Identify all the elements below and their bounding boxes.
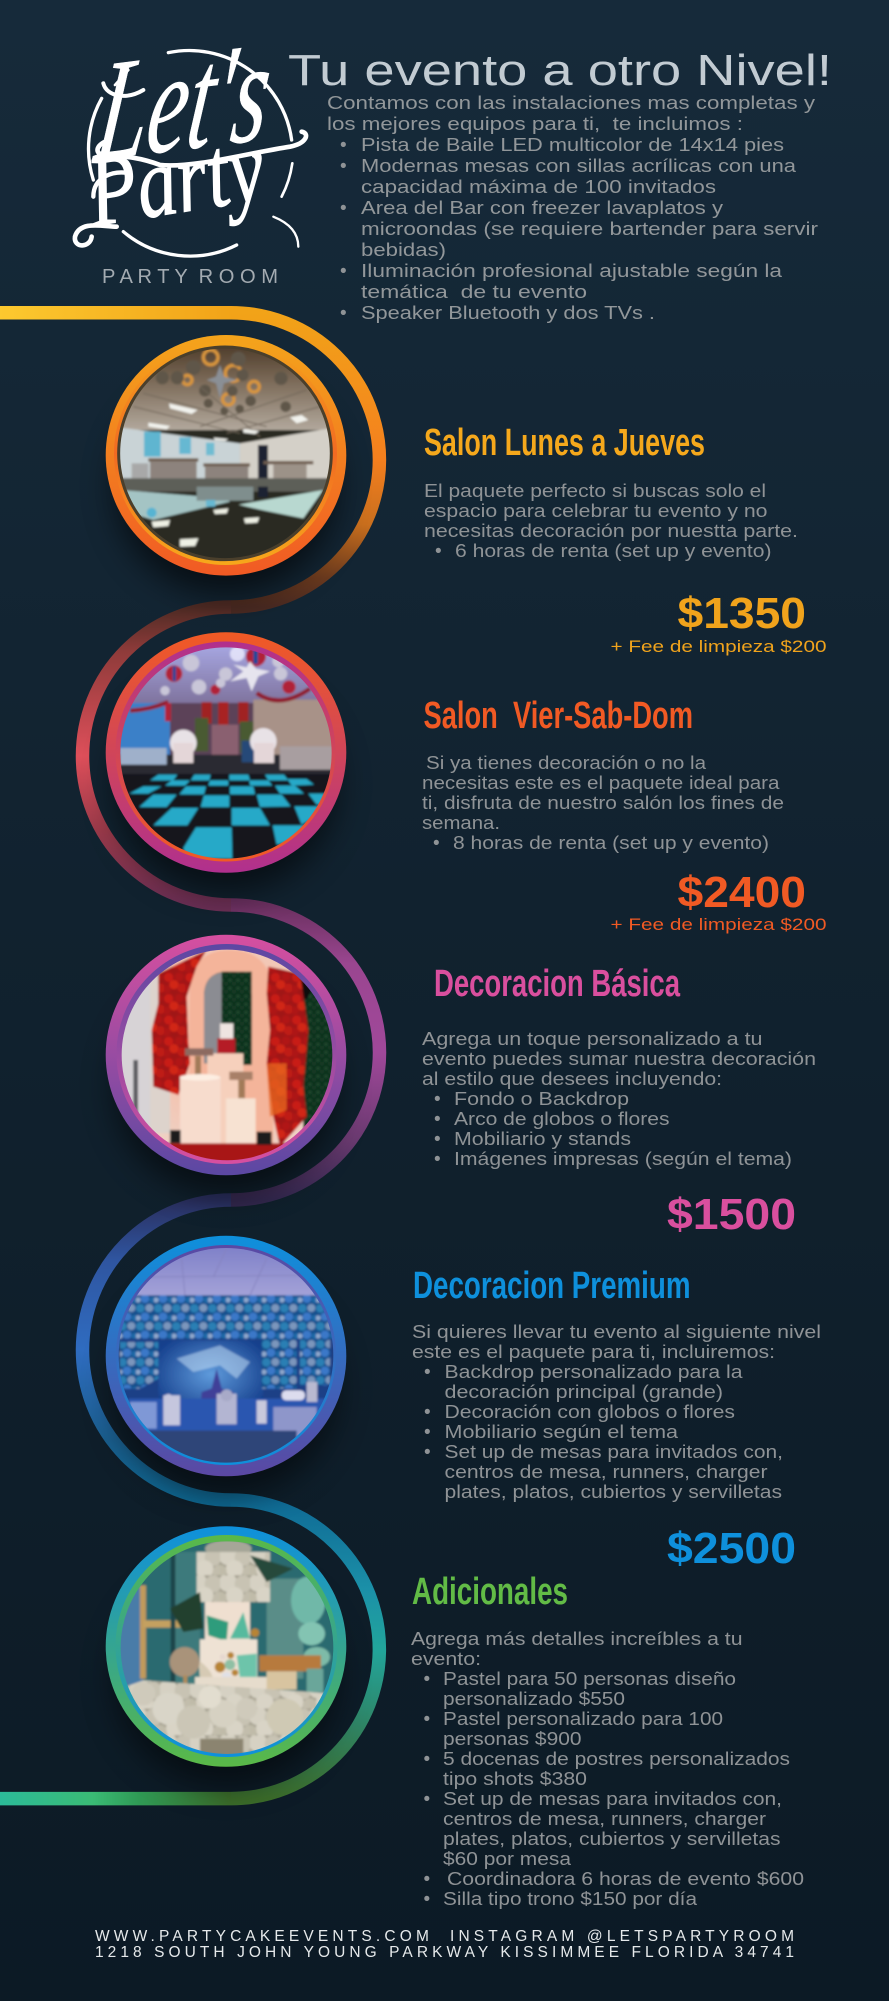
panel: Decoracion Premium	[412, 1265, 821, 1573]
description: Set up de mesas para invitados con,	[443, 1789, 782, 1809]
description: •	[424, 1889, 430, 1910]
intro text block: Pista de Baile LED multicolor de 14x14 pies	[361, 134, 784, 155]
panel: Salon Lunes a Jueves	[424, 422, 826, 656]
description: •	[434, 1109, 441, 1130]
heading: Salon Lunes a Jueves	[424, 422, 705, 464]
title: Tu evento a otro Nivel!	[288, 46, 832, 95]
intro text block: Iluminación profesional ajustable según la	[361, 260, 783, 281]
heading: Decoracion Básica	[434, 963, 681, 1005]
logo	[75, 11, 306, 288]
description: •	[433, 833, 440, 854]
logo ring and swashes	[75, 51, 306, 256]
intro text block: •	[340, 198, 347, 219]
description: semana.	[422, 813, 500, 833]
description: necesitas este es el paquete ideal para	[422, 773, 781, 793]
description: •	[424, 1749, 430, 1770]
price: $2400	[678, 868, 806, 917]
circle photo: cake and extras	[106, 1526, 346, 1786]
description: •	[424, 1789, 430, 1810]
price: $1500	[667, 1190, 796, 1239]
footer contact info: WWW.PARTYCAKEEVENTS.COM INSTAGRAM @LETSPARTYROOM	[95, 1928, 794, 1945]
description: plates, platos, cubiertos y servilletas	[444, 1482, 782, 1502]
description: •	[424, 1869, 430, 1890]
description: ti, disfruta de nuestro salón los fines de	[422, 793, 784, 813]
intro text block: •	[340, 135, 347, 156]
intro text block: los mejores equipos para ti, te incluimos :	[327, 113, 743, 134]
heading: Salon Vier-Sab-Dom	[424, 695, 693, 737]
description: $60 por mesa	[443, 1849, 572, 1869]
description: este es el paquete para ti, incluiremos:	[412, 1342, 775, 1362]
heading: Decoracion Premium	[413, 1265, 690, 1307]
intro text block: bebidas)	[361, 239, 446, 260]
intro text block: Speaker Bluetooth y dos TVs .	[361, 302, 655, 323]
price: $2500	[667, 1524, 796, 1573]
description: Decoración con globos o flores	[444, 1402, 735, 1422]
description	[422, 753, 784, 854]
heading: Adicionales	[412, 1571, 568, 1613]
description: tipo shots $380	[443, 1769, 587, 1789]
description: •	[424, 1422, 431, 1443]
description: 6 horas de renta (set up y evento)	[455, 541, 772, 561]
description: •	[424, 1709, 430, 1730]
description: •	[424, 1402, 431, 1423]
logo wordmark Let's: Let's	[88, 11, 279, 192]
description: Agrega un toque personalizado a tu	[422, 1029, 762, 1049]
description: evento:	[411, 1649, 481, 1669]
intro text block: microondas (se requiere bartender para servir	[361, 218, 818, 239]
description: 5 docenas de postres personalizados	[443, 1749, 790, 1769]
description: centros de mesa, runners, charger	[443, 1809, 766, 1829]
description: •	[434, 1089, 441, 1110]
description: Si quieres llevar tu evento al siguiente nivel	[412, 1322, 821, 1342]
description	[411, 1629, 804, 1910]
intro text block: •	[340, 303, 347, 324]
description: Arco de globos o flores	[454, 1109, 670, 1129]
circle photo: empty salon	[100, 335, 350, 594]
description: •	[434, 1129, 441, 1150]
panel: Adicionales	[411, 1571, 804, 1910]
description: Coordinadora 6 horas de evento $600	[447, 1869, 804, 1889]
intro text block: Modernas mesas con sillas acrílicas con una	[361, 155, 797, 176]
intro text block: Area del Bar con freezer lavaplatos y	[361, 197, 724, 218]
description: Mobiliario y stands	[454, 1129, 631, 1149]
footer contact info: 1218 SOUTH JOHN YOUNG PARKWAY KISSIMMEE FLORIDA 34741	[95, 1944, 794, 1961]
description: decoración principal (grande)	[444, 1382, 723, 1402]
description: Set up de mesas para invitados con,	[444, 1442, 783, 1462]
intro text block: temática de tu evento	[361, 281, 587, 302]
description: Imágenes impresas (según el tema)	[454, 1149, 792, 1169]
winding ribbon connecting the circles	[0, 313, 379, 1799]
description: Pastel personalizado para 100	[443, 1709, 723, 1729]
footer contact info	[95, 1928, 794, 1961]
description: Mobiliario según el tema	[444, 1422, 679, 1442]
description: Agrega más detalles increíbles a tu	[411, 1629, 742, 1649]
description: •	[424, 1669, 430, 1690]
description: •	[424, 1362, 431, 1383]
description: necesitas decoración por nuestta parte.	[424, 521, 798, 541]
cleaning fee: + Fee de limpieza $200	[610, 637, 826, 656]
description: plates, platos, cubiertos y servilletas	[443, 1829, 780, 1849]
description: Si ya tienes decoración o no la	[426, 753, 707, 773]
logo wordmark Party: Party	[79, 110, 272, 248]
description: El paquete perfecto si buscas solo el	[424, 481, 766, 501]
price: $1350	[678, 589, 806, 638]
description	[424, 481, 798, 562]
description: espacio para celebrar tu evento y no	[424, 501, 768, 521]
description: personalizado $550	[443, 1689, 625, 1709]
description: Fondo o Backdrop	[454, 1089, 629, 1109]
description: centros de mesa, runners, charger	[444, 1462, 768, 1482]
panel: Decoracion Básica	[422, 963, 816, 1239]
description: Pastel para 50 personas diseño	[443, 1669, 736, 1689]
description: evento puedes sumar nuestra decoración	[422, 1049, 816, 1069]
intro text block	[327, 92, 818, 324]
intro text block: capacidad máxima de 100 invitados	[361, 176, 716, 197]
description: •	[424, 1442, 431, 1463]
description: al estilo que desees incluyendo:	[422, 1069, 722, 1089]
intro text block: •	[340, 261, 347, 282]
description	[412, 1322, 821, 1502]
circle photo: basic decoration	[106, 935, 346, 1194]
intro text block: Contamos con las instalaciones mas completas y	[327, 92, 816, 113]
description: personas $900	[443, 1729, 582, 1749]
cleaning fee: + Fee de limpieza $200	[610, 915, 826, 934]
panel: Salon Vier-Sab-Dom	[422, 695, 826, 934]
description: •	[434, 1149, 441, 1170]
description: •	[435, 541, 442, 562]
circle photo: premium decoration	[106, 1236, 346, 1496]
description: Backdrop personalizado para la	[444, 1362, 744, 1382]
description: 8 horas de renta (set up y evento)	[453, 833, 769, 853]
logo subtitle: P A R T Y R O O M	[102, 266, 278, 288]
description	[422, 1029, 816, 1170]
intro text block: •	[340, 156, 347, 177]
circle photo: LED dance floor	[106, 632, 346, 892]
description: Silla tipo trono $150 por día	[443, 1889, 698, 1909]
